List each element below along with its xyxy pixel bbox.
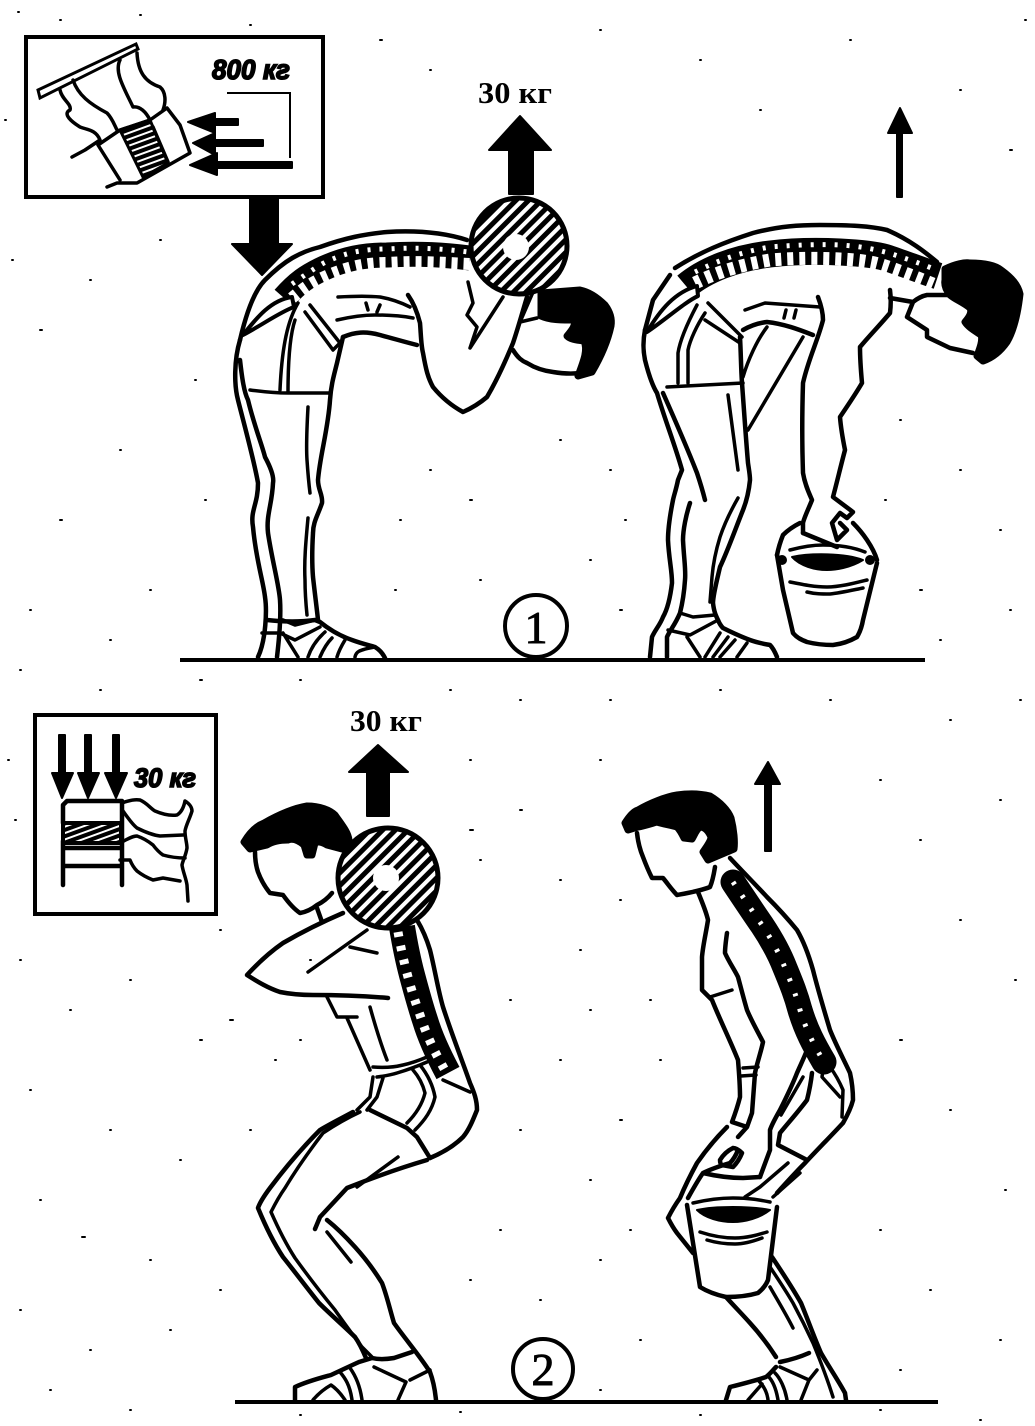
legs and trunks <box>235 337 343 657</box>
step number 2: 2 <box>532 1344 554 1395</box>
ground line: section 1 <box>180 658 925 662</box>
head and hair <box>513 350 580 374</box>
foot <box>267 620 385 658</box>
figure: bent over lifting bucket <box>643 225 1020 657</box>
disk <box>338 828 438 928</box>
arrow: thin up arrow lower right <box>755 762 780 851</box>
spine <box>733 882 824 1062</box>
spine <box>284 248 470 298</box>
face <box>637 833 715 895</box>
hip and thigh <box>760 1033 812 1177</box>
hair <box>625 794 734 860</box>
spine <box>398 927 448 1073</box>
step number 1: 1 <box>524 602 548 653</box>
step number 1 <box>505 595 567 657</box>
arm <box>247 913 388 998</box>
bucket <box>687 1198 777 1297</box>
legs and trunks <box>643 330 777 657</box>
inset panel: spine under 30 kg <box>35 715 216 914</box>
figure: bent over with barbell <box>235 198 611 658</box>
label: 30 kg lower: 30 кг <box>350 703 422 738</box>
arrow: up arrow with 30 kg lower <box>349 745 408 816</box>
figure: squat with barbell <box>244 806 477 1400</box>
hand <box>668 1127 760 1253</box>
step number 2 <box>513 1339 573 1399</box>
label: 30 kg inset: 30 кг <box>134 763 196 793</box>
foot <box>726 1353 809 1400</box>
torso and arm <box>343 295 527 412</box>
thigh and legs <box>258 1112 436 1400</box>
hair <box>244 806 349 855</box>
back outline <box>240 231 467 340</box>
ground line: section 2 <box>235 1400 938 1404</box>
arrow: up arrow with 30 kg <box>489 116 551 194</box>
disk <box>471 198 567 294</box>
label: 30 kg top: 30 кг <box>478 75 552 110</box>
pelvis <box>243 297 294 335</box>
back <box>730 858 853 1193</box>
legs <box>726 1257 846 1400</box>
label: 800 kg: 800 кг <box>212 54 290 85</box>
bucket <box>777 523 877 645</box>
inset panel: spine under 800 kg <box>26 37 323 197</box>
head and hair <box>890 295 973 353</box>
chest and arm <box>698 892 763 1137</box>
foot <box>668 613 747 657</box>
back outline <box>645 225 937 330</box>
waist <box>357 1057 435 1130</box>
figure: squat lifting bucket <box>625 794 853 1400</box>
arrow: large down arrow <box>232 197 292 275</box>
spine <box>686 245 938 286</box>
torso and arms <box>743 290 891 540</box>
face <box>255 852 332 922</box>
foot <box>295 1352 412 1400</box>
arrow: thin up arrow top right <box>888 108 912 197</box>
back <box>417 920 477 1158</box>
pelvis <box>647 286 698 332</box>
